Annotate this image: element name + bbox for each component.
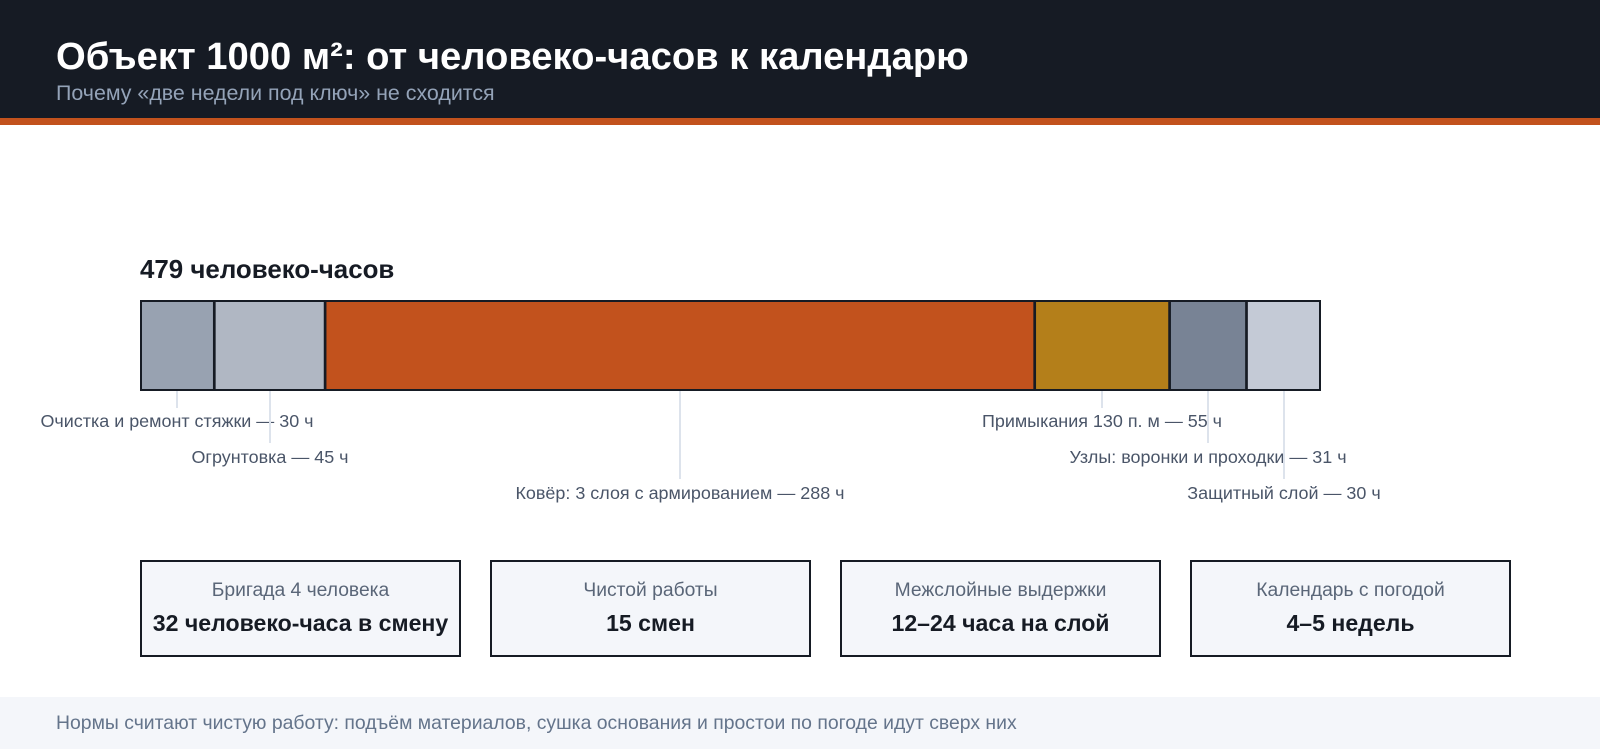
segment: details (1170, 301, 1246, 390)
card: calendar: Календарь с погодой (1256, 580, 1445, 601)
card: clean work: 15 смен (606, 610, 695, 636)
card: interlayer pauses (840, 560, 1161, 657)
label: membrane: Ковёр: 3 слоя с армированием — 288 ч (515, 483, 845, 503)
footer note: Нормы считают чистую работу: подъём материалов, сушка основания и простои по погоде идут сверх них (56, 712, 1017, 734)
leader: protective layer (1283, 391, 1285, 479)
bar heading: 479 человеко-часов (140, 256, 394, 284)
card: crew (140, 560, 461, 657)
card: crew: 32 человеко-часа в смену (153, 610, 448, 636)
leader: cleaning (176, 391, 178, 408)
leader: membrane (679, 391, 681, 479)
segment: primer (215, 301, 325, 390)
card: calendar: 4–5 недель (1286, 610, 1415, 636)
label: details: Узлы: воронки и проходки — 31 ч (1069, 447, 1347, 467)
segment: abutments (1035, 301, 1169, 390)
stacked bar (140, 300, 1321, 391)
card: crew: Бригада 4 человека (212, 580, 389, 601)
header band (0, 0, 1600, 125)
card: clean work: Чистой работы (583, 580, 718, 601)
card: interlayer pauses: Межслойные выдержки (895, 580, 1106, 601)
segment: membrane (325, 301, 1034, 390)
label: protective layer: Защитный слой — 30 ч (1187, 483, 1381, 503)
segment: protective layer (1247, 301, 1320, 390)
card: clean work (490, 560, 811, 657)
label: abutments: Примыкания 130 п. м — 55 ч (982, 411, 1222, 431)
label: primer: Огрунтовка — 45 ч (191, 447, 349, 467)
leader: abutments (1101, 391, 1103, 408)
leader: details (1207, 391, 1209, 443)
card: calendar (1190, 560, 1511, 657)
subtitle: Почему «две недели под ключ» не сходится (56, 81, 495, 105)
footer band (0, 697, 1600, 749)
title: Объект 1000 м²: от человеко-часов к календарю (56, 35, 969, 78)
leader: primer (269, 391, 271, 443)
card: interlayer pauses: 12–24 часа на слой (892, 610, 1110, 636)
label: cleaning: Очистка и ремонт стяжки — 30 ч (40, 411, 314, 431)
segment: cleaning (141, 301, 214, 390)
